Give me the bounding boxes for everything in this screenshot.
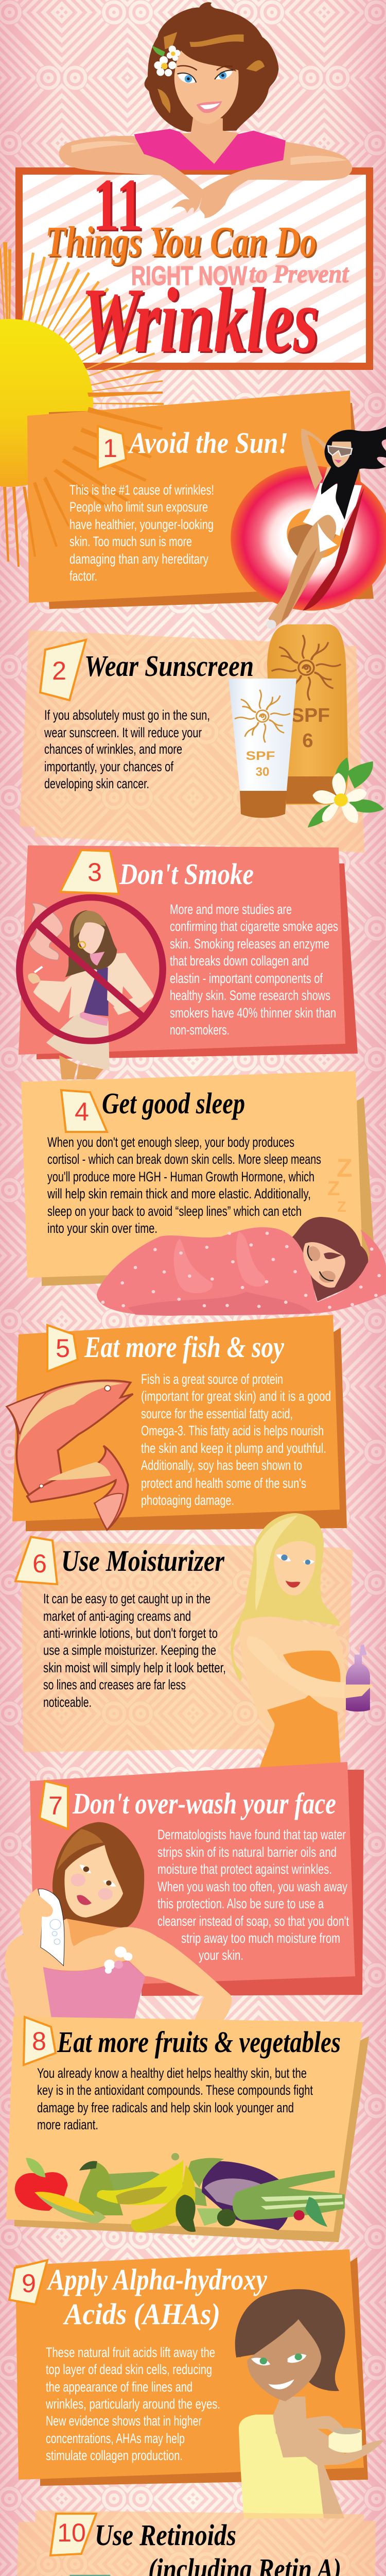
body text: This is the #1 cause of wrinkles!	[69, 482, 214, 498]
body text	[69, 482, 214, 584]
neck and chest	[177, 116, 239, 165]
fruits and vegetables	[15, 2153, 345, 2232]
body text: healthy skin. Some research shows	[170, 988, 330, 1003]
panel 9: apply alpha-hydroxy acids	[9, 2249, 384, 2518]
hair fringe	[236, 2298, 299, 2358]
heading number 11: 11	[95, 165, 145, 248]
hair	[65, 910, 117, 977]
section title: Apply Alpha-hydroxy	[46, 2263, 267, 2296]
panel front	[27, 391, 356, 603]
body text: elastin - important components of	[170, 971, 323, 986]
heading line: Things You Can Do: Things You Can Do	[45, 218, 317, 266]
translucent panel layers	[21, 1541, 353, 1752]
section title: Get good sleep	[102, 1087, 245, 1120]
body text: top layer of dead skin cells, reducing	[46, 2362, 212, 2377]
zzz icon	[327, 1154, 353, 1215]
body text: that breaks down collagen and	[170, 953, 309, 969]
jar	[329, 2428, 362, 2453]
panel front	[6, 2016, 363, 2232]
leg	[268, 515, 336, 626]
fish upper	[7, 1381, 133, 1499]
flowers in hair	[152, 45, 181, 76]
sleeping woman under blanket	[97, 1217, 386, 1316]
badge 8: 8	[32, 2027, 46, 2056]
badge 9: 9	[22, 2269, 36, 2298]
body text: concentrations, AHAs may help	[46, 2431, 185, 2446]
blanket	[97, 1227, 386, 1316]
girl with washcloth	[5, 1822, 232, 2020]
body text: Additionally, soy has been shown to	[141, 1458, 302, 1473]
body text: stimulate collagen production.	[46, 2448, 183, 2463]
body text: market of anti-aging creams and	[43, 1608, 191, 1624]
body text: wrinkles, particularly around the eyes.	[45, 2396, 220, 2412]
section title: Use Retinoids	[95, 2518, 236, 2552]
courgette	[108, 2172, 207, 2206]
body text	[47, 1134, 321, 1236]
section title: Use Moisturizer	[61, 1544, 224, 1578]
towel	[260, 1651, 341, 1767]
face	[274, 1541, 315, 1596]
face	[79, 922, 104, 954]
blonde woman in towel	[231, 1513, 373, 1767]
body text: skin moist will simply help it look better,	[43, 1660, 226, 1675]
panel 3: don't smoke	[19, 845, 358, 1079]
body text: factor.	[69, 568, 97, 584]
body text	[45, 2345, 220, 2463]
dark swimsuit side	[303, 487, 364, 611]
radish	[294, 2210, 305, 2221]
navy bottle	[68, 2575, 112, 2576]
panel front	[30, 1762, 355, 1988]
zzz icon: Z	[327, 1177, 340, 1200]
body text: the appearance of fine lines and	[46, 2379, 192, 2395]
face	[174, 50, 239, 124]
body text	[141, 1371, 331, 1508]
body text: protect and health some of the sun's	[141, 1476, 306, 1491]
panel back	[40, 2257, 368, 2486]
badge 6	[15, 1537, 57, 1584]
badge 7: 7	[48, 1791, 63, 1820]
heading: 11 Things You Can Do Right Now to Prevent Wrinkles	[45, 164, 349, 373]
sunscreen bottle SPF 6	[267, 624, 348, 805]
section title: Acids (AHAs)	[63, 2297, 220, 2331]
section title: Wear Sunscreen	[84, 649, 254, 683]
panel front	[19, 845, 345, 1055]
body text: damaging than any hereditary	[69, 551, 208, 567]
panel back	[26, 1328, 347, 1531]
swim ring	[231, 466, 386, 611]
body text: skin. Smoking releases an enzyme	[170, 936, 329, 952]
hair	[52, 1822, 144, 1928]
body text	[170, 902, 338, 1038]
body text: damage by free radicals and help skin look younger and	[37, 2100, 294, 2115]
heading number 11: 11	[93, 164, 143, 246]
bananas	[97, 2160, 183, 2205]
neck and body	[241, 2397, 345, 2518]
thigh	[288, 523, 342, 556]
panel back	[49, 403, 374, 609]
title sign frame	[15, 167, 373, 370]
panel back	[37, 863, 358, 1059]
body text: People who limit sun exposure	[69, 499, 208, 515]
fish illustration	[7, 1381, 133, 1530]
body text: wear sunscreen. It will reduce your	[44, 725, 202, 740]
blanket dots	[101, 1232, 381, 1309]
raised arm	[301, 429, 330, 490]
body text: have healthier, younger-looking	[69, 517, 214, 532]
heading line: Right now to prevent: to Prevent	[249, 259, 349, 288]
panel 6: use moisturizer	[15, 1513, 373, 1767]
mouth	[197, 101, 222, 113]
badge 8	[24, 2017, 56, 2065]
body text	[44, 707, 210, 791]
translucent panel layers	[11, 2511, 376, 2576]
body text: so lines and creases are far less	[43, 1677, 186, 1692]
body text: sleep on your back to avoid “sleep lines” which can etch	[47, 1204, 302, 1219]
panel 10: use retinoids	[11, 2511, 376, 2576]
shirt	[134, 129, 286, 170]
purple bottle	[346, 1655, 370, 1711]
badge 6: 6	[32, 1549, 47, 1578]
heading line: Right now to prevent	[131, 259, 349, 291]
smoking girl with prohibition sign	[20, 897, 163, 1079]
sunscreen tube SPF 30: SPF	[246, 749, 275, 763]
section title	[46, 2263, 267, 2331]
body text: noticeable.	[43, 1694, 92, 1710]
body text: More and more studies are	[170, 902, 292, 917]
body text: Fish is a great source of protein	[141, 1371, 283, 1387]
badge 7	[40, 1781, 68, 1829]
sun rays	[0, 242, 164, 430]
body text: New evidence shows that in higher	[46, 2413, 202, 2429]
jacket	[33, 965, 97, 1019]
body text: skin. Too much sun is more	[69, 534, 192, 549]
torso	[303, 483, 362, 536]
broccoli	[176, 2195, 196, 2232]
arm and shoulders	[240, 1617, 373, 1731]
section title: Avoid the Sun!	[128, 426, 288, 460]
pear	[78, 2162, 123, 2215]
fish lower	[27, 1446, 128, 1530]
plumeria flower	[308, 757, 384, 827]
face	[303, 1242, 345, 1287]
apple	[15, 2172, 68, 2211]
section title: Eat more fish & soy	[84, 1330, 284, 1364]
panel back	[14, 2036, 369, 2242]
illustration: woman on swim ring	[231, 427, 386, 629]
panel back	[142, 1770, 364, 1996]
body text: photoaging damage.	[141, 1493, 234, 1508]
body text: will help skin remain thick and more elastic. Additionally,	[47, 1186, 311, 1201]
corn	[34, 2192, 95, 2220]
washcloth	[38, 1889, 64, 1966]
translucent panel layers	[20, 630, 364, 853]
hair	[321, 427, 386, 520]
sun	[0, 319, 93, 487]
badge 4	[61, 1090, 107, 1132]
body text: When you don't get enough sleep, your body produces	[47, 1134, 294, 1150]
body text	[157, 1827, 349, 1963]
badge 1	[98, 426, 126, 469]
shoe	[267, 620, 276, 629]
panel 1: avoid the sun	[3, 391, 374, 609]
body text: If you absolutely must go in the sun,	[44, 707, 210, 723]
body text: source for the essential fatty acid,	[141, 1406, 293, 1421]
bottles	[31, 2575, 112, 2576]
body text: importantly, your chances of	[44, 759, 173, 774]
arm, torso	[5, 1919, 232, 2020]
zzz icon: Z	[337, 1154, 353, 1182]
sunscreen bottle SPF 6: SPF	[291, 705, 330, 726]
section title: Don't Smoke	[119, 857, 254, 891]
panel front	[12, 1315, 340, 1521]
corsage	[104, 1946, 132, 1974]
top	[239, 2415, 324, 2518]
body text: It can be easy to get caught up in the	[43, 1591, 210, 1606]
body text: (important for great skin) and it is a good	[141, 1388, 331, 1404]
face	[247, 2318, 321, 2401]
skirt	[46, 1011, 110, 1070]
badge 1: 1	[103, 434, 117, 463]
badge 3: 3	[87, 858, 102, 887]
body text: use a simple moisturizer. Keeping the	[43, 1642, 216, 1658]
smoke	[29, 903, 63, 960]
panel 2: wear sunscreen	[20, 624, 384, 853]
illustration: woman leaning on sign	[59, 2, 352, 218]
panel 5: eat more fish and soy	[7, 1315, 347, 1531]
badge 3	[60, 850, 119, 894]
hair	[145, 2, 278, 132]
body text: into your skin over time.	[47, 1221, 157, 1236]
body text: These natural fruit acids lift away the	[46, 2345, 215, 2360]
celery	[233, 2171, 345, 2220]
crossing arm	[247, 1636, 373, 1700]
hair	[231, 1513, 340, 1681]
section title	[95, 2518, 341, 2576]
body text: moisture that protect against wrinkles.	[157, 1861, 332, 1877]
panel 7: don't over-wash your face	[5, 1762, 364, 2020]
face	[64, 1845, 123, 1918]
badge 2: 2	[52, 656, 66, 685]
body text: developing skin cancer.	[44, 776, 149, 791]
hand	[19, 1888, 53, 1946]
zzz icon: Z	[337, 1199, 346, 1215]
body text: this protection. Also be sure to use a	[157, 1896, 324, 1911]
panel 4: get good sleep	[21, 1071, 386, 1316]
body text: Omega-3. This fatty acid is helps nourish	[141, 1423, 324, 1438]
eyes	[178, 71, 233, 83]
top	[43, 1961, 145, 2020]
body text: chances of wrinkles, and more	[44, 741, 182, 757]
panel front	[15, 2249, 364, 2480]
shirt	[84, 965, 108, 1016]
sunscreen tube SPF 30	[229, 679, 296, 818]
badge 10: 10	[57, 2518, 86, 2547]
panel back	[42, 1097, 376, 1286]
woman holding cream jar	[235, 2289, 384, 2518]
panel front	[21, 1071, 363, 1278]
sun rays over the sign	[9, 252, 155, 403]
body text: your skin.	[199, 1947, 243, 1963]
body text	[43, 1591, 226, 1710]
body text	[37, 2065, 313, 2132]
rays across the panel	[3, 392, 163, 567]
heading line: Right now to prevent: RIGHT NOW	[131, 261, 248, 291]
panel 8: eat more fruits and vegetables	[6, 2016, 369, 2242]
body text: more radiant.	[37, 2117, 98, 2132]
badge 5	[47, 1325, 78, 1371]
badge 9	[9, 2260, 47, 2304]
face and sunglasses	[331, 442, 352, 467]
legs	[59, 1055, 103, 1079]
arm and hand	[276, 2416, 384, 2466]
body text: the skin and keep it plump and youthful.	[141, 1440, 326, 1456]
body text: non-smokers.	[170, 1022, 230, 1038]
body text: anti-wrinkle lotions, but don't forget to	[43, 1625, 218, 1641]
badge 2	[40, 640, 86, 700]
hair back	[235, 2289, 345, 2391]
prohibition sign	[20, 897, 163, 1041]
hand and cigarette	[28, 973, 41, 984]
hair	[292, 1217, 368, 1301]
arms	[59, 136, 203, 213]
badge 10	[50, 2514, 96, 2555]
badge 5: 5	[56, 1334, 70, 1363]
eggplant	[202, 2161, 290, 2230]
badge 4: 4	[75, 1097, 89, 1126]
sunscreen bottle SPF 6: 6	[302, 730, 313, 752]
sunscreen tube SPF 30: 30	[256, 765, 269, 779]
